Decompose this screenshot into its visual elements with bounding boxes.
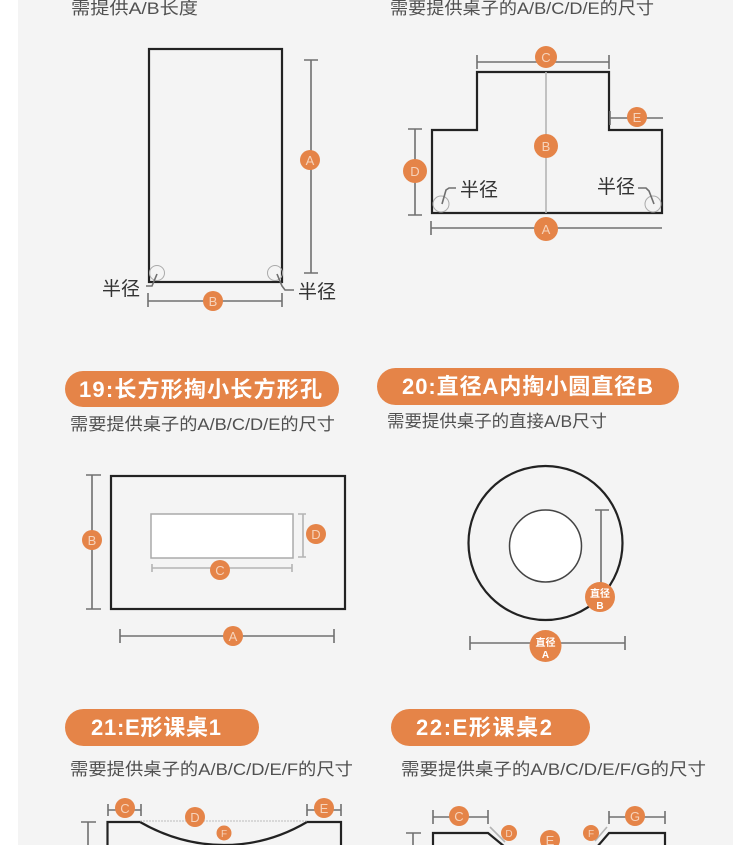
heading: shape 22 (391, 709, 590, 746)
diagram: E-shaped desk 1: E (320, 801, 329, 816)
diagram: E-shaped desk 2: F (588, 829, 594, 840)
diagram: E-shaped desk 1 (81, 798, 341, 845)
diagram: rectangle with rectangular hole: A (229, 629, 238, 644)
diagram: circle with circular hole (468, 466, 625, 662)
diagram: T-shaped table: E (633, 110, 642, 125)
heading: shape 21: 21:E形课桌1 (91, 715, 221, 740)
diagram: rectangle with rounded corners: B (209, 294, 217, 309)
diagram: E-shaped desk 2: D (505, 829, 513, 840)
diagram: rectangle with rectangular hole: D (311, 527, 321, 542)
diagram: E-shaped desk 2: G (630, 809, 640, 824)
heading: shape 22: 22:E形课桌2 (416, 715, 552, 740)
diagram: T-shaped table: C (541, 50, 551, 65)
diagram: T-shaped table (403, 46, 663, 241)
caption: shape 19 requirement: 需要提供桌子的A/B/C/D/E的尺寸 (70, 415, 335, 434)
diagram: rectangle with rectangular hole: B (88, 533, 96, 548)
diagram: rectangle with rectangular hole: C (215, 563, 225, 578)
diagram: rectangle with rounded corners: A (306, 153, 315, 168)
heading: shape 19: 19:长方形掏小长方形孔 (79, 377, 322, 402)
caption: shape 21 requirement: 需要提供桌子的A/B/C/D/E/F的尺寸 (70, 760, 353, 779)
heading: shape 19 (65, 371, 339, 407)
diagram: rectangle with rounded corners: 半径 (298, 281, 336, 303)
diagram: circle with circular hole: 直径 (536, 636, 556, 649)
diagram: circle with circular hole: B (596, 601, 604, 612)
diagram: E-shaped desk 1: D (190, 810, 200, 825)
diagram: T-shaped table: B (542, 139, 550, 154)
diagram: circle with circular hole: 直径 (590, 587, 610, 600)
diagram: T-shaped table: 半径 (460, 179, 498, 201)
heading: shape 20 (377, 368, 679, 405)
caption: shape 20 requirement: 需要提供桌子的直接A/B尺寸 (387, 412, 607, 431)
heading: shape 21 (65, 709, 259, 746)
diagram: T-shaped table: A (542, 222, 551, 237)
diagram: E-shaped desk 1: C (120, 801, 130, 816)
caption: shape 22 requirement: 需要提供桌子的A/B/C/D/E/F/G的尺寸 (401, 760, 706, 779)
heading: shape 20: 20:直径A内掏小圆直径B (402, 374, 653, 399)
diagram: rectangle with rectangular hole (82, 475, 345, 646)
diagram: T-shaped table: D (410, 164, 420, 179)
diagram: T-shaped table: 半径 (597, 176, 635, 198)
diagram: E-shaped desk 2: C (454, 809, 464, 824)
diagram: circle with circular hole: A (542, 650, 549, 661)
diagram: E-shaped desk 1: F (221, 829, 227, 840)
diagram: E-shaped desk 2 (406, 806, 665, 845)
diagram: rectangle with rounded corners: 半径 (102, 278, 140, 300)
diagram: rectangle with rounded corners (102, 49, 336, 311)
